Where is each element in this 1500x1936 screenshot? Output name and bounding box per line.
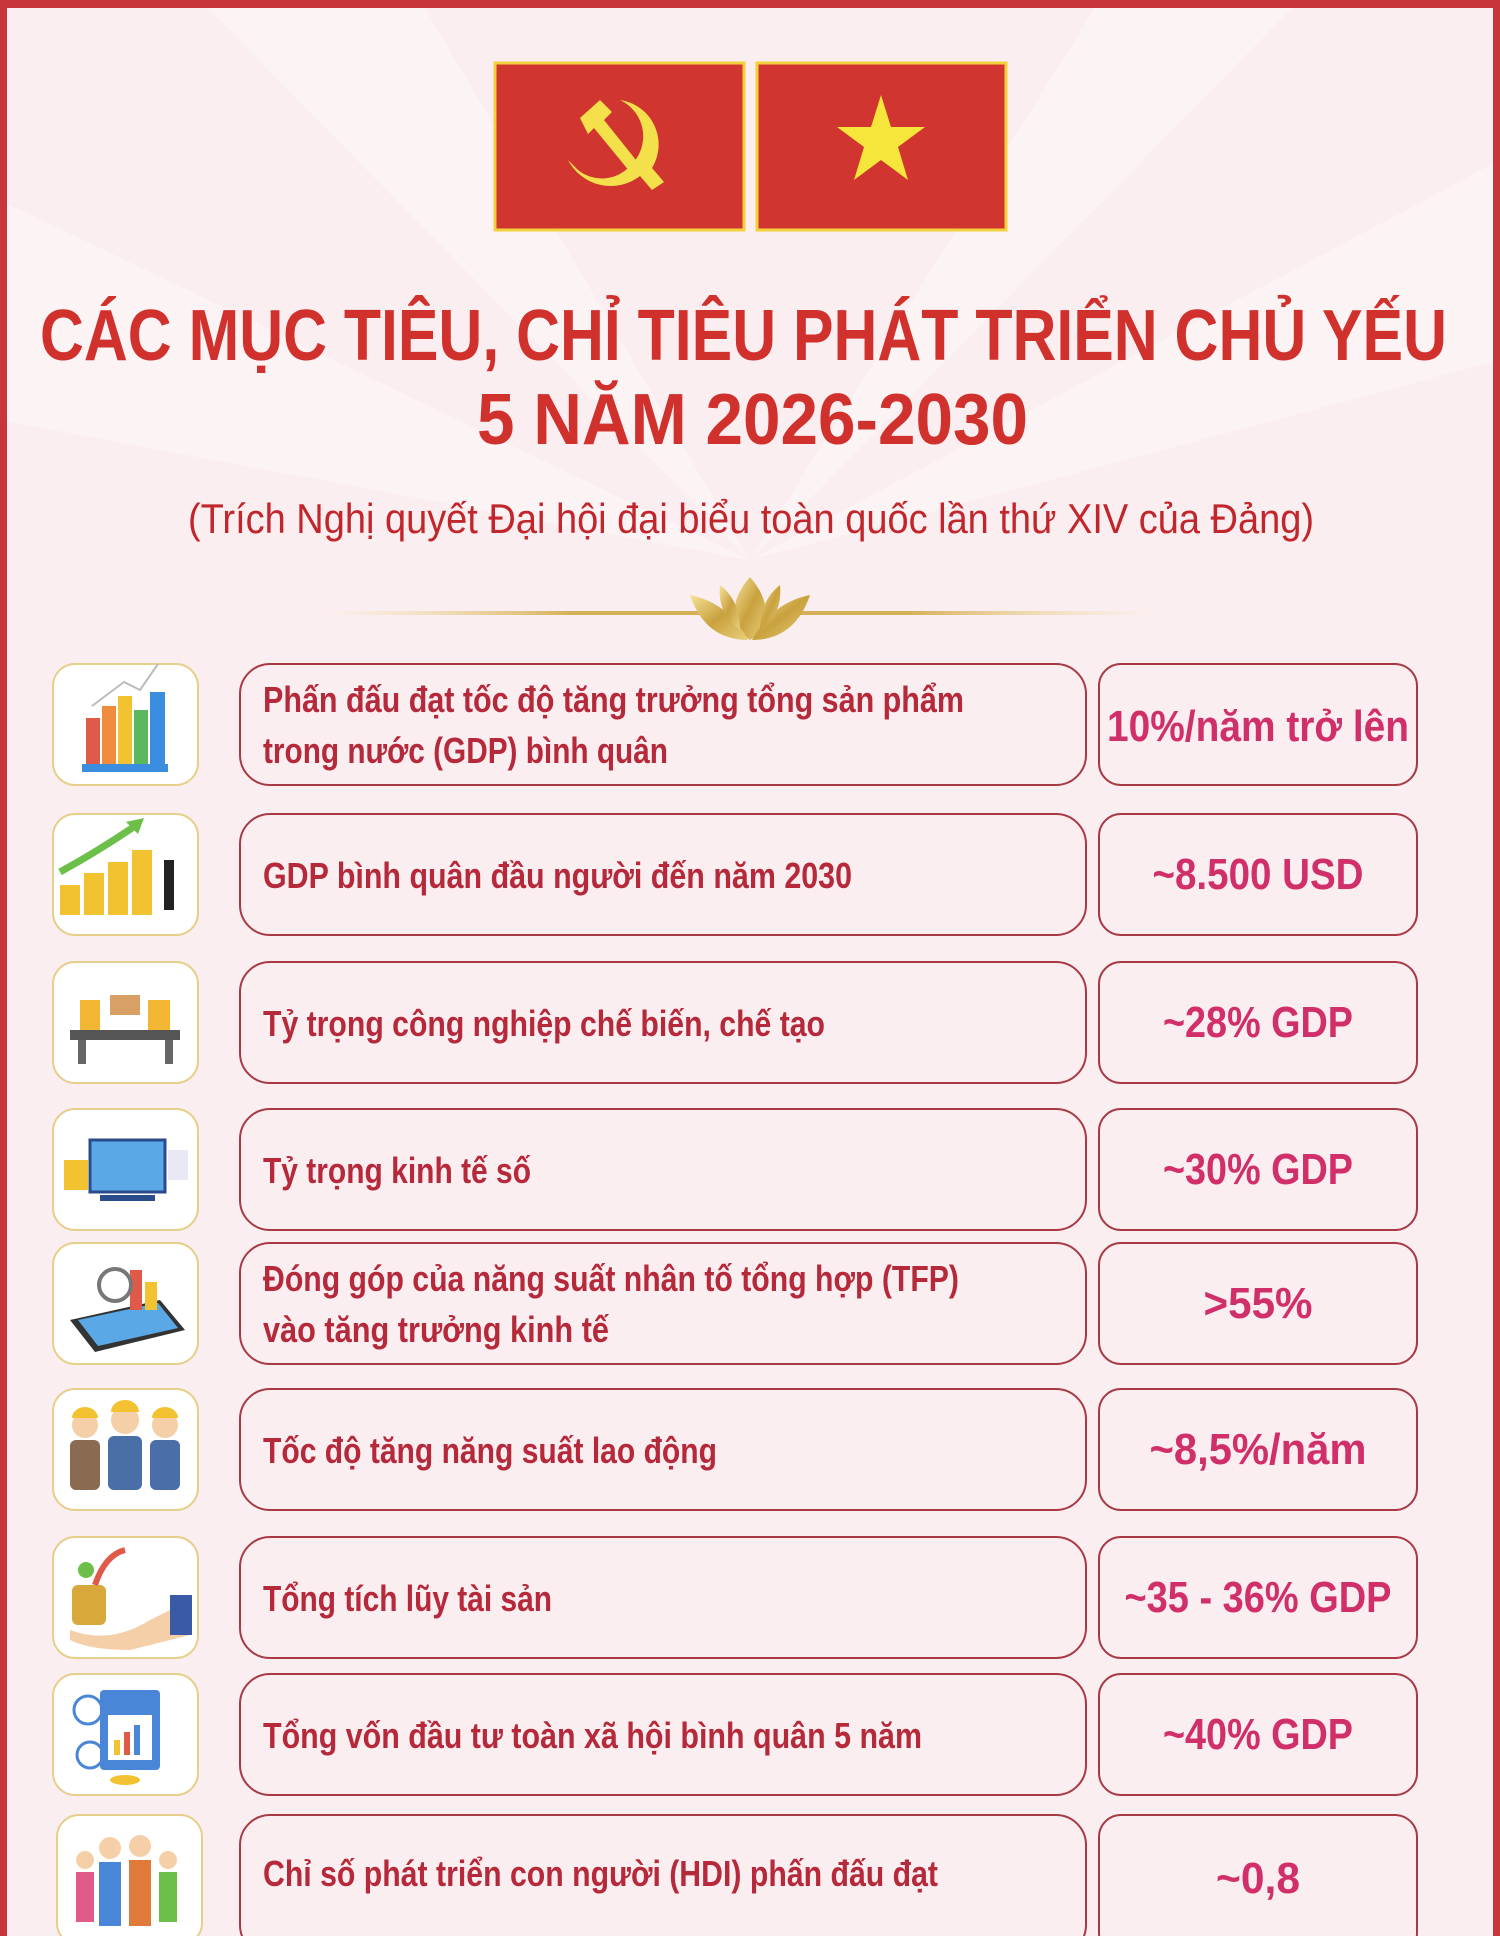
row 5: Đóng góp của năng suất nhân tố tổng hợp (TFP) xyxy=(263,1258,959,1299)
icon: hand with coins xyxy=(53,1537,198,1658)
icon: investment report xyxy=(53,1674,198,1795)
title xyxy=(40,295,1447,460)
icon: factory xyxy=(53,962,198,1083)
title: 5 NĂM 2026-2030 xyxy=(477,380,1028,460)
row 1 xyxy=(53,664,1417,785)
row 8: ~40% GDP xyxy=(1163,1710,1353,1759)
row 5: >55% xyxy=(1204,1279,1312,1328)
row 5 xyxy=(53,1243,1417,1364)
icon: family xyxy=(57,1815,202,1936)
row 1: trong nước (GDP) bình quân xyxy=(263,730,668,771)
icon: tablet analytics xyxy=(53,1243,198,1364)
icon: digital economy xyxy=(53,1109,198,1230)
icon: coins growth xyxy=(53,814,198,935)
divider with lotus xyxy=(320,577,1160,640)
row 7: Tổng tích lũy tài sản xyxy=(263,1578,552,1619)
icon: workers xyxy=(53,1389,198,1510)
row 4: ~30% GDP xyxy=(1163,1145,1353,1194)
subtitle: (Trích Nghị quyết Đại hội đại biểu toàn quốc lần thứ XIV của Đảng) xyxy=(188,495,1314,542)
row 6: ~8,5%/năm xyxy=(1150,1425,1366,1474)
row 4: Tỷ trọng kinh tế số xyxy=(263,1150,531,1191)
row 6 xyxy=(53,1389,1417,1510)
row 8 xyxy=(53,1674,1417,1795)
icon: bar chart xyxy=(53,664,198,785)
row 2 xyxy=(53,814,1417,935)
row 9 xyxy=(57,1815,1417,1936)
row 1: Phấn đấu đạt tốc độ tăng trưởng tổng sản phẩm xyxy=(263,679,964,720)
row 2: ~8.500 USD xyxy=(1152,850,1364,899)
icon: Vietnam flag xyxy=(757,63,1006,230)
row 3: ~28% GDP xyxy=(1163,998,1353,1047)
row 4 xyxy=(53,1109,1417,1230)
row 9: Chỉ số phát triển con người (HDI) phấn đấu đạt xyxy=(263,1853,938,1894)
row 3: Tỷ trọng công nghiệp chế biến, chế tạo xyxy=(263,1003,825,1044)
row 7: ~35 - 36% GDP xyxy=(1124,1573,1392,1622)
row 5: vào tăng trưởng kinh tế xyxy=(263,1309,610,1350)
row 3 xyxy=(53,962,1417,1083)
icon: party flag xyxy=(495,63,744,230)
row 7 xyxy=(53,1537,1417,1658)
row 1: 10%/năm trở lên xyxy=(1107,702,1409,751)
row 9: ~0,8 xyxy=(1216,1854,1300,1903)
row 2: GDP bình quân đầu người đến năm 2030 xyxy=(263,855,852,896)
row 8: Tổng vốn đầu tư toàn xã hội bình quân 5 năm xyxy=(263,1715,922,1756)
row 6: Tốc độ tăng năng suất lao động xyxy=(263,1430,717,1471)
